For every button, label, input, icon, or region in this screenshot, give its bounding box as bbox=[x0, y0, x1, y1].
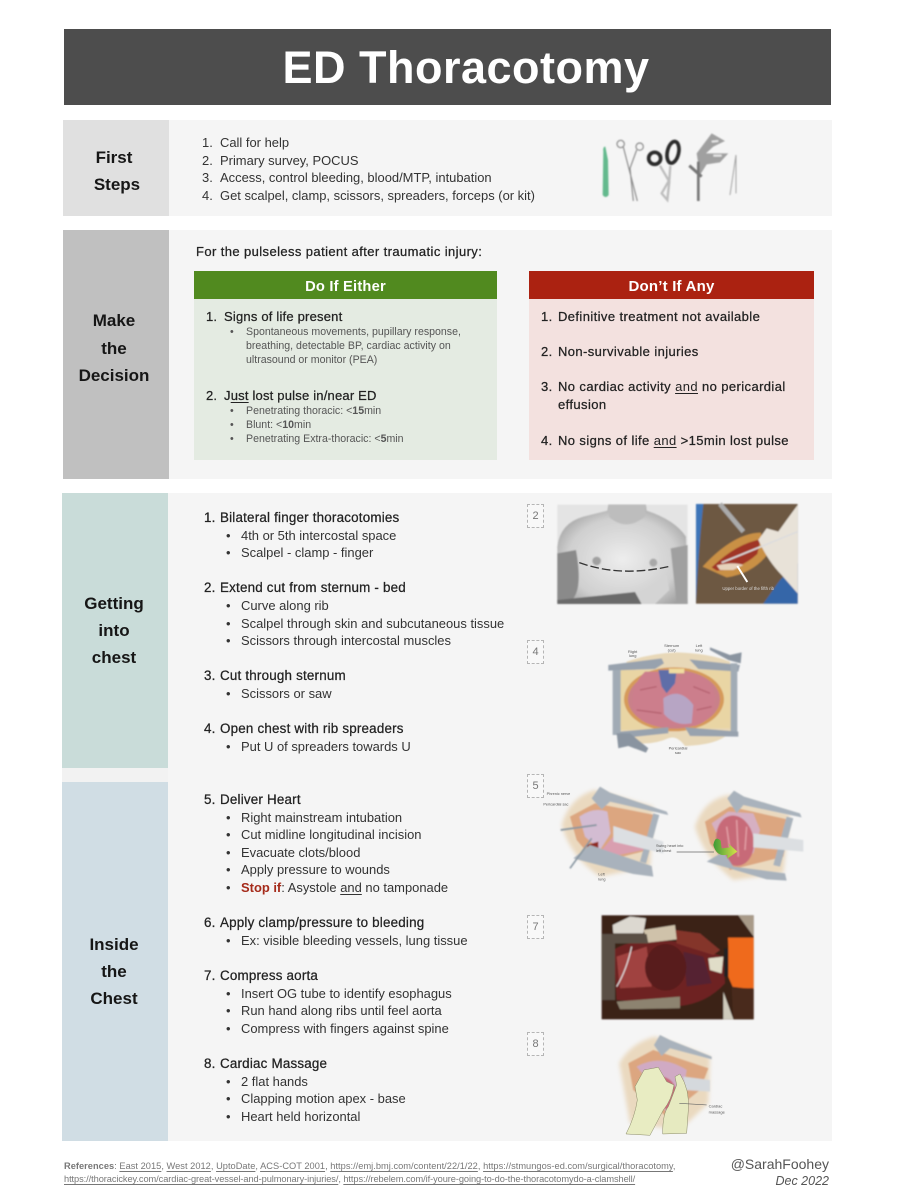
inside the chest steps: • bbox=[226, 1021, 231, 1036]
getting into chest steps: 4. bbox=[204, 721, 216, 736]
inside the chest steps: 8. bbox=[204, 1056, 216, 1071]
decision label: the bbox=[101, 339, 127, 358]
step tag 4: 4 bbox=[532, 646, 539, 658]
first steps list: 2. bbox=[202, 153, 213, 168]
getting into chest label bbox=[62, 493, 168, 768]
inside the chest label: Chest bbox=[90, 989, 138, 1008]
do item 1 details: • bbox=[230, 326, 234, 338]
inside the chest steps: 2 flat hands bbox=[241, 1074, 308, 1089]
inside the chest steps: Apply pressure to wounds bbox=[241, 862, 390, 877]
getting into chest steps: 2. bbox=[204, 580, 216, 595]
author credit: @SarahFoohey bbox=[731, 1156, 829, 1172]
don't item 4: 4. bbox=[541, 433, 553, 448]
inside the chest steps: • bbox=[226, 880, 231, 895]
getting into chest steps: Extend cut from sternum - bed bbox=[220, 580, 406, 595]
step tag 8 bbox=[527, 1032, 544, 1056]
don't item 1: 1. bbox=[541, 309, 553, 324]
do item 2 details: Blunt: <10min bbox=[246, 419, 311, 431]
inside the chest steps: • bbox=[226, 1074, 231, 1089]
decision label bbox=[63, 230, 169, 479]
illustration: rib spreader open chest bbox=[608, 643, 742, 755]
illustration: rib spreader open chest: Pericardial bbox=[669, 746, 688, 751]
step tag 7: 7 bbox=[532, 921, 539, 933]
don't item 2: Non-survivable injuries bbox=[558, 344, 699, 359]
photo: incision along rib bbox=[696, 504, 798, 604]
inside the chest steps: Ex: visible bleeding vessels, lung tissue bbox=[241, 933, 468, 948]
do item 1 details bbox=[230, 326, 461, 366]
inside the chest steps: Clapping motion apex - base bbox=[241, 1091, 406, 1106]
do item 2: Just lost pulse in/near ED bbox=[224, 388, 377, 403]
illustration: rib spreader open chest: lung bbox=[695, 647, 703, 652]
step tag 4 bbox=[527, 640, 544, 664]
inside the chest steps: 7. bbox=[204, 968, 216, 983]
getting into chest steps: Open chest with rib spreaders bbox=[220, 721, 404, 736]
getting into chest steps: • bbox=[226, 545, 231, 560]
inside the chest steps: Evacuate clots/blood bbox=[241, 845, 360, 860]
do item 1: Signs of life present bbox=[224, 309, 342, 324]
references: References: East 2015, West 2012, UptoDate, ACS-COT 2001, https://emj.bmj.com/content/22/1/22, https://stmungos-ed.com/surgical/thoracotomy, bbox=[64, 1161, 676, 1171]
panel: do if either bbox=[194, 271, 497, 460]
inside the chest steps: • bbox=[226, 1091, 231, 1106]
getting into chest steps: • bbox=[226, 528, 231, 543]
photo: open chest with heart bbox=[602, 915, 754, 1019]
getting into chest steps: Scissors or saw bbox=[241, 686, 332, 701]
getting into chest label: into bbox=[98, 621, 130, 640]
first steps label: First bbox=[96, 148, 132, 167]
step tag 2 bbox=[527, 504, 544, 528]
inside the chest steps: • bbox=[226, 1003, 231, 1018]
photo: incision line on chest bbox=[557, 505, 688, 604]
first steps list: 4. bbox=[202, 188, 213, 203]
first steps list: Get scalpel, clamp, scissors, spreaders, forceps (or kit) bbox=[220, 188, 535, 203]
inside the chest steps: • bbox=[226, 845, 231, 860]
inside the chest steps: 5. bbox=[204, 792, 216, 807]
do item 1 details: breathing, detectable BP, cardiac activity on bbox=[246, 340, 451, 352]
inside the chest steps: Compress with fingers against spine bbox=[241, 1021, 449, 1036]
panel: make the decision bbox=[63, 230, 832, 479]
step tag 5: 5 bbox=[532, 780, 539, 792]
panel: don't if any bbox=[529, 271, 814, 460]
inside the chest label: the bbox=[101, 962, 127, 981]
do header: Do If Either bbox=[305, 279, 386, 295]
getting into chest steps: Scalpel - clamp - finger bbox=[241, 545, 373, 560]
inside the chest steps: Deliver Heart bbox=[220, 792, 301, 807]
getting into chest steps: 4th or 5th intercostal space bbox=[241, 528, 396, 543]
title: ED Thoracotomy bbox=[282, 42, 650, 93]
don't item 2: 2. bbox=[541, 344, 553, 359]
illustration: pericardial incision: Pericardial sac bbox=[543, 803, 569, 807]
getting into chest label: chest bbox=[92, 648, 136, 667]
author credit: Dec 2022 bbox=[775, 1174, 829, 1188]
do item 1 details: ultrasound or monitor (PEA) bbox=[246, 354, 377, 366]
illustration: pericardial incision: Phrenic nerve bbox=[547, 792, 570, 796]
don't item 1: Definitive treatment not available bbox=[558, 309, 760, 324]
inside the chest steps: Cardiac Massage bbox=[220, 1056, 327, 1071]
getting into chest steps: Curve along rib bbox=[241, 598, 329, 613]
inside the chest steps: Compress aorta bbox=[220, 968, 318, 983]
inside the chest steps: Stop if: Asystole and no tamponade bbox=[241, 880, 448, 895]
getting into chest steps: • bbox=[226, 616, 231, 631]
inside the chest steps: • bbox=[226, 1109, 231, 1124]
getting into chest steps: Scalpel through skin and subcutaneous tissue bbox=[241, 616, 504, 631]
step tag 5 bbox=[527, 774, 544, 798]
getting into chest steps: • bbox=[226, 686, 231, 701]
illustration: pericardial incision: Left bbox=[598, 872, 606, 876]
do item 2 details: Penetrating thoracic: <15min bbox=[246, 405, 381, 417]
do item 2 details: • bbox=[230, 433, 234, 445]
illustration: swing heart into left chest bbox=[677, 791, 803, 881]
references bbox=[64, 1161, 676, 1185]
photo: incision along rib: Upper border of the fifth rib bbox=[722, 586, 775, 591]
illustration: pericardial incision: left chest bbox=[656, 849, 672, 853]
don't item 3 bbox=[541, 379, 786, 412]
getting into chest steps: Cut through sternum bbox=[220, 668, 346, 683]
inside the chest steps: Run hand along ribs until feel aorta bbox=[241, 1003, 442, 1018]
inside the chest steps: • bbox=[226, 862, 231, 877]
inside the chest steps: Cut midline longitudinal incision bbox=[241, 827, 422, 842]
inside the chest steps: • bbox=[226, 933, 231, 948]
first steps label: Steps bbox=[94, 175, 140, 194]
do item 1: 1. bbox=[206, 309, 217, 324]
illustration: cardiac massage: massage bbox=[709, 1110, 726, 1115]
don't item 3: 3. bbox=[541, 379, 553, 394]
illustration: cardiac massage: Cardiac bbox=[709, 1103, 722, 1108]
do item 2 details: • bbox=[230, 419, 234, 431]
illustration: rib spreader open chest: lung bbox=[629, 653, 636, 658]
getting into chest label: Getting bbox=[84, 594, 144, 613]
inside the chest steps: Apply clamp/pressure to bleeding bbox=[220, 915, 424, 930]
don't item 3: effusion bbox=[558, 397, 606, 412]
do item 2 details bbox=[230, 405, 404, 445]
first steps list: 1. bbox=[202, 135, 213, 150]
don't header: Don’t If Any bbox=[628, 278, 714, 295]
getting into chest steps: • bbox=[226, 633, 231, 648]
illustration: pericardial incision: Swing heart into bbox=[656, 844, 683, 848]
illustration: rib spreader open chest: Right bbox=[628, 649, 638, 654]
do header bbox=[194, 271, 497, 299]
getting into chest steps: 1. bbox=[204, 510, 216, 525]
first steps list: Primary survey, POCUS bbox=[220, 153, 358, 168]
getting into chest steps: Put U of spreaders towards U bbox=[241, 739, 411, 754]
don't header bbox=[529, 271, 814, 299]
references: https://thoracickey.com/cardiac-great-vessel-and-pulmonary-injuries/, https://rebelem.com/if-youre-going-to-do-the-thoracotomydo-a-clamshell/ bbox=[64, 1174, 635, 1184]
illustration: cardiac massage bbox=[619, 1035, 726, 1135]
first steps label bbox=[63, 120, 169, 216]
do item 2 details: • bbox=[230, 405, 234, 417]
gap strip bbox=[62, 768, 168, 782]
decision label: Make bbox=[93, 311, 135, 330]
first steps list: 3. bbox=[202, 170, 213, 185]
illustration: rib spreader open chest: Left bbox=[696, 643, 703, 648]
inside the chest steps: • bbox=[226, 986, 231, 1001]
getting into chest steps bbox=[204, 510, 504, 754]
first steps list: Access, control bleeding, blood/MTP, intubation bbox=[220, 170, 492, 185]
illustration: pericardial incision: lung bbox=[598, 877, 606, 881]
do item 2 details: Penetrating Extra-thoracic: <5min bbox=[246, 433, 404, 445]
panel: first steps bbox=[63, 120, 832, 216]
illustration: pericardial incision bbox=[543, 787, 683, 881]
inside the chest steps: Heart held horizontal bbox=[241, 1109, 360, 1124]
illustration: rib spreader open chest: sac bbox=[675, 750, 681, 755]
inside the chest steps: Right mainstream intubation bbox=[241, 810, 402, 825]
getting into chest steps: Bilateral finger thoracotomies bbox=[220, 510, 399, 525]
decision intro: For the pulseless patient after traumatic injury: bbox=[196, 244, 482, 259]
illustration: rib spreader open chest: Sternum bbox=[664, 643, 680, 648]
getting into chest steps: Scissors through intercostal muscles bbox=[241, 633, 451, 648]
getting into chest steps: • bbox=[226, 739, 231, 754]
step tag 8: 8 bbox=[532, 1038, 539, 1050]
inside the chest label: Inside bbox=[89, 935, 139, 954]
don't item 4: No signs of life and >15min lost pulse bbox=[558, 433, 789, 448]
illustration: rib spreader open chest: (cut) bbox=[668, 647, 676, 652]
step tag 7 bbox=[527, 915, 544, 939]
getting into chest steps: 3. bbox=[204, 668, 216, 683]
first steps list bbox=[202, 135, 535, 203]
first steps list: Call for help bbox=[220, 135, 289, 150]
title bbox=[64, 29, 831, 105]
do item 2: 2. bbox=[206, 388, 217, 403]
inside the chest steps: • bbox=[226, 827, 231, 842]
getting into chest steps: • bbox=[226, 598, 231, 613]
inside the chest steps: • bbox=[226, 810, 231, 825]
step tag 2: 2 bbox=[532, 510, 539, 522]
decision label: Decision bbox=[79, 366, 149, 385]
don't item 3: No cardiac activity and no pericardial bbox=[558, 379, 786, 394]
inside the chest steps: Insert OG tube to identify esophagus bbox=[241, 986, 452, 1001]
inside the chest steps bbox=[204, 792, 468, 1124]
icon: surgical tools bbox=[603, 133, 736, 201]
do item 1 details: Spontaneous movements, pupillary response, bbox=[246, 326, 461, 338]
inside the chest steps: 6. bbox=[204, 915, 216, 930]
author credit bbox=[731, 1156, 829, 1188]
panel: procedure background bbox=[168, 493, 832, 1141]
inside the chest label bbox=[62, 782, 168, 1141]
